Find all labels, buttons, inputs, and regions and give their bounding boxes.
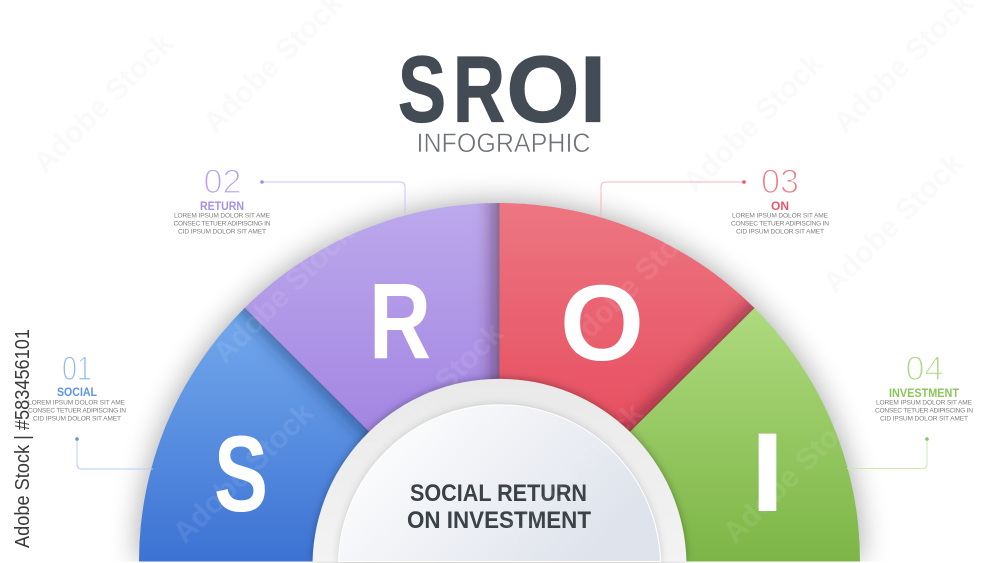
centre hub (313, 379, 686, 562)
description 01: CID IPSUM DOLOR SIT AMET (33, 416, 121, 422)
semicircle segments (139, 203, 860, 562)
heading RETURN: RETURN (200, 199, 244, 213)
hub label: ON INVESTMENT (407, 507, 591, 534)
faint diagonal watermarks: Adobe Stock (817, 147, 970, 300)
hub inner plate (339, 405, 660, 562)
connector dot 02 (260, 180, 264, 184)
segment: R purple (234, 203, 500, 442)
heading INVESTMENT: INVESTMENT (889, 386, 960, 400)
faint diagonal watermarks: Adobe Stock (357, 317, 510, 470)
subtitle: INFOGRAPHIC: INFOGRAPHIC (416, 128, 590, 158)
callout 01 (28, 350, 153, 469)
number 01: 01 (62, 350, 92, 388)
segment: O red (480, 203, 754, 432)
description 02: LOREM IPSUM DOLOR SIT AME (174, 212, 271, 220)
connector dot 01 (75, 437, 79, 441)
faint diagonal watermarks: Adobe Stock (167, 397, 320, 550)
heading ON: ON (771, 199, 789, 213)
description 02: CID IPSUM DOLOR SIT AMET (178, 228, 266, 236)
stock id side label: Adobe Stock | #583456101 (12, 329, 34, 548)
hub label: SOCIAL RETURN (410, 480, 587, 507)
number 04: 04 (906, 350, 944, 388)
connector 04 (847, 439, 927, 468)
description 04: CONSEC TETUER ADIPISCING IN (875, 408, 973, 414)
faint diagonal watermarks: Adobe Stock (27, 27, 180, 180)
faint diagonal watermarks: Adobe Stock (207, 217, 360, 370)
description 04: LOREM IPSUM DOLOR SIT AME (876, 400, 973, 406)
title letter R: R (453, 36, 505, 142)
description 03: CONSEC TETUER ADIPISCING IN (731, 220, 829, 228)
connector 03 (601, 182, 744, 216)
hub label (407, 480, 591, 534)
description 04: CID IPSUM DOLOR SIT AMET (880, 416, 968, 422)
segment letter: I: I (750, 410, 784, 535)
hub outer ring (313, 379, 686, 562)
segment: S blue (139, 308, 369, 562)
segment letter: S: S (214, 413, 268, 534)
description 03: LOREM IPSUM DOLOR SIT AME (732, 212, 829, 220)
connector dot 04 (925, 437, 929, 441)
description 01: LOREM IPSUM DOLOR SIT AME (28, 400, 126, 406)
description 03: CID IPSUM DOLOR SIT AMET (736, 228, 824, 236)
description 02: CONSEC TETUER ADIPISCING IN (174, 220, 271, 228)
connector 02 (262, 182, 405, 214)
callout 03 (601, 163, 829, 236)
segment: I green (619, 296, 860, 562)
title letter S: S (398, 36, 446, 142)
connector 01 (77, 439, 153, 469)
description 01: CONSEC TETUER ADIPISCING IN (28, 408, 126, 414)
segment letter: R: R (369, 260, 431, 381)
faint diagonal watermarks: Adobe Stock (497, 397, 650, 550)
number 02: 02 (204, 163, 242, 201)
faint diagonal watermarks: Adobe Stock (677, 47, 830, 200)
title letter O: O (506, 36, 580, 142)
faint diagonal watermarks: Adobe Stock (557, 207, 710, 360)
heading SOCIAL: SOCIAL (57, 385, 97, 399)
segment letter: O: O (560, 262, 644, 383)
title letter I: I (580, 36, 606, 142)
number 03: 03 (761, 163, 799, 201)
title (398, 36, 606, 142)
connector dot 03 (742, 180, 746, 184)
outer semicircle shadow (139, 203, 860, 561)
callout 04 (847, 350, 973, 468)
faint diagonal watermarks: Adobe Stock (717, 397, 870, 550)
callout 02 (174, 163, 405, 236)
